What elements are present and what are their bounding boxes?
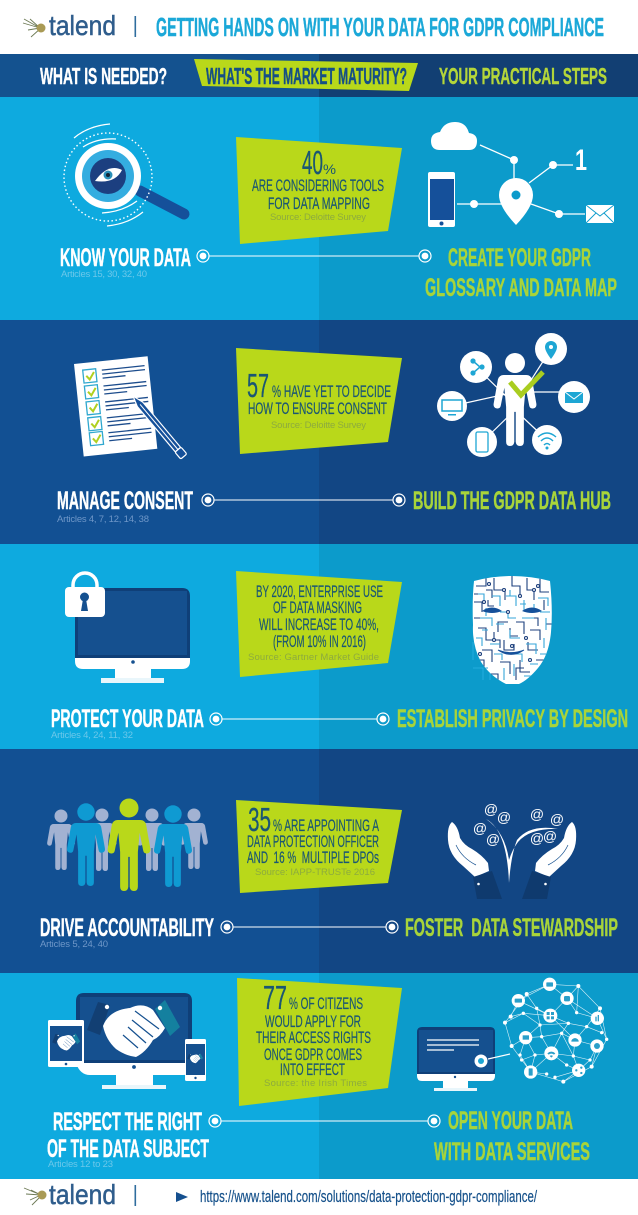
stat callout: 40%: FOR DATA MAPPING bbox=[268, 195, 370, 213]
icon: hands holding data sprout: @ bbox=[497, 809, 511, 825]
stat callout: data masking: WILL INCREASE TO 40%, bbox=[259, 616, 379, 634]
column heading: market maturity bbox=[194, 59, 418, 91]
talend wordmark: talend bbox=[49, 10, 116, 41]
icon: hands holding data sprout: @ bbox=[550, 811, 564, 827]
monitor bbox=[417, 1027, 510, 1091]
stat callout: 77% bbox=[237, 978, 402, 1106]
heading: respect the right of the data subject: OF THE DATA SUBJECT bbox=[47, 1135, 209, 1163]
stat callout: 57%: % HAVE YET TO DECIDE bbox=[272, 383, 391, 401]
footer divider bbox=[134, 1185, 136, 1206]
stat callout: 77%: Source: the Irish Times bbox=[264, 1078, 367, 1089]
stat callout: data masking bbox=[236, 571, 402, 677]
connector line bbox=[197, 250, 431, 262]
stat callout: 77%: INTO EFFECT bbox=[280, 1061, 345, 1079]
column heading: market maturity: WHAT'S THE MARKET MATURITY? bbox=[206, 63, 407, 89]
icon: hands holding data sprout: @ bbox=[484, 801, 498, 817]
footer bbox=[0, 1179, 638, 1215]
icon: data map: 1 bbox=[575, 144, 587, 177]
heading: drive accountability bbox=[40, 914, 214, 950]
heading: protect your data: PROTECT YOUR DATA bbox=[51, 705, 204, 733]
section 4: drive accountability bbox=[0, 749, 638, 973]
icon: devices with handshake bbox=[48, 993, 206, 1089]
heading: manage consent bbox=[57, 487, 193, 525]
stat callout: 40%: % bbox=[323, 161, 336, 177]
heading: drive accountability: DRIVE ACCOUNTABILITY bbox=[40, 914, 214, 942]
stat callout: 35%: AND 16 % MULTIPLE DPOs bbox=[247, 849, 379, 867]
stat callout: 57%: 57 bbox=[247, 367, 269, 404]
navigation band bbox=[0, 54, 638, 97]
heading: protect your data bbox=[51, 705, 204, 741]
stat callout: 57%: HOW TO ENSURE CONSENT bbox=[248, 400, 387, 418]
connector line bbox=[210, 713, 389, 725]
heading: know your data bbox=[60, 244, 191, 280]
stat callout: 77%: THEIR ACCESS RIGHTS bbox=[256, 1029, 371, 1047]
heading: protect your data: Articles 4, 24, 11, 32 bbox=[51, 730, 133, 741]
header divider bbox=[134, 16, 136, 37]
stat callout: 40%: ARE CONSIDERING TOOLS bbox=[252, 177, 384, 195]
connector line bbox=[221, 921, 398, 933]
stat callout: 57% bbox=[236, 348, 402, 454]
icon: hands holding data sprout: @ bbox=[530, 830, 544, 846]
heading: create your gdpr glossary and data map bbox=[425, 244, 617, 302]
icon: checklist and pencil bbox=[74, 356, 187, 459]
section 1: know your data bbox=[0, 97, 638, 320]
heading: manage consent: MANAGE CONSENT bbox=[57, 487, 193, 515]
heading: open your data with data services bbox=[434, 1107, 590, 1166]
stat callout: 35%: Source: IAPP-TRUSTe 2016 bbox=[255, 867, 375, 878]
stat callout: 77%: % OF CITIZENS bbox=[289, 995, 363, 1013]
talend wordmark: talend bbox=[49, 1179, 116, 1210]
connector line bbox=[202, 494, 405, 506]
heading: respect the right of the data subject: Articles 12 to 23 bbox=[48, 1159, 113, 1170]
section 5: respect the right of the data subject bbox=[0, 973, 638, 1179]
icon: hands holding data sprout: @ bbox=[473, 820, 487, 836]
stat callout: 77%: WOULD APPLY FOR bbox=[265, 1013, 361, 1031]
stat callout: 57%: Source: Deloitte Survey bbox=[271, 420, 366, 431]
stat callout: 40%: Source: Deloitte Survey bbox=[270, 212, 366, 223]
icon: talend star logo bbox=[24, 1188, 46, 1205]
heading: respect the right of the data subject: RESPECT THE RIGHT bbox=[53, 1108, 202, 1136]
icon: hands holding data sprout bbox=[448, 801, 576, 899]
stat callout: 35%: DATA PROTECTION OFFICER bbox=[247, 833, 379, 851]
stat callout: 35%: % ARE APPOINTING A bbox=[273, 817, 379, 835]
icon: data hub person bbox=[437, 333, 590, 457]
icon: data map bbox=[428, 122, 614, 227]
heading: manage consent: Articles 4, 7, 12, 14, 38 bbox=[57, 514, 149, 525]
stat callout: 77%: ONCE GDPR COMES bbox=[264, 1046, 362, 1064]
heading: drive accountability: Articles 5, 24, 40 bbox=[40, 939, 108, 950]
connector line bbox=[209, 1115, 440, 1127]
heading: respect the right of the data subject bbox=[47, 1108, 209, 1170]
heading: know your data: KNOW YOUR DATA bbox=[60, 244, 191, 272]
stat callout: 35% bbox=[236, 800, 402, 893]
icon: locked monitor bbox=[65, 573, 190, 683]
column heading: what is needed: WHAT IS NEEDED? bbox=[40, 63, 167, 89]
stat callout: data masking: Source: Gartner Market Guide bbox=[248, 652, 379, 663]
icon: magnifying glass with eye bbox=[64, 124, 184, 226]
icon: hands holding data sprout: @ bbox=[543, 828, 557, 844]
icon: circuit mask bbox=[473, 576, 552, 684]
stat callout: data masking: OF DATA MASKING bbox=[273, 599, 362, 617]
stat callout: 40% bbox=[236, 137, 402, 244]
icon: hands holding data sprout: @ bbox=[530, 806, 544, 822]
page header bbox=[0, 0, 638, 54]
network globe bbox=[503, 978, 608, 1084]
stat callout: 77%: 77 bbox=[263, 979, 287, 1016]
stat callout: 35%: 35 bbox=[248, 801, 271, 838]
heading: know your data: Articles 15, 30, 32, 40 bbox=[61, 269, 147, 280]
icon: team of people bbox=[47, 798, 208, 891]
icon: talend star logo bbox=[23, 19, 46, 37]
stat callout: 40%: 40 bbox=[302, 144, 323, 181]
icon: hands holding data sprout: @ bbox=[486, 831, 500, 847]
stat callout: data masking: BY 2020, ENTERPRISE USE bbox=[256, 583, 383, 601]
icon: monitor linked to data network globe bbox=[417, 978, 608, 1091]
section 2: manage consent bbox=[0, 320, 638, 544]
icon: play arrow bbox=[176, 1192, 188, 1202]
stat callout: data masking: (FROM 10% IN 2016) bbox=[273, 633, 366, 651]
section 3: protect your data bbox=[0, 544, 638, 749]
